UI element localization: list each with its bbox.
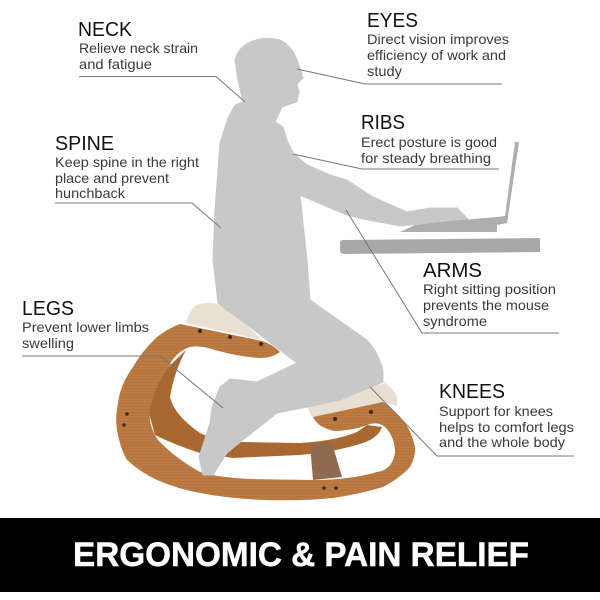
ribs heading: RIBS: [361, 111, 405, 134]
ribs callout: [293, 111, 499, 169]
eyes leader line: [297, 69, 502, 84]
arms text: prevents the mouse: [423, 297, 549, 313]
knees text: helps to comfort legs: [439, 419, 574, 435]
spine text: hunchback: [55, 185, 126, 201]
eyes text: [367, 31, 509, 79]
neck heading: NECK: [78, 18, 132, 41]
neck text: Relieve neck strain: [79, 40, 198, 56]
arms leader line: [346, 210, 559, 333]
seat cushion: [186, 303, 262, 340]
spine callout: [55, 132, 221, 228]
main wooden frame: [116, 324, 415, 500]
ribs leader line: [293, 154, 499, 169]
ribs text: Erect posture is good: [361, 134, 497, 150]
neck callout: [78, 18, 245, 102]
eyes callout: [297, 9, 509, 84]
legs text: swelling: [22, 335, 74, 351]
eyes text: study: [367, 63, 402, 79]
laptop: [400, 142, 519, 232]
spine heading: SPINE: [55, 132, 114, 155]
rocking chair: [116, 303, 415, 500]
cross strut: [310, 443, 342, 480]
eyes text: efficiency of work and: [367, 47, 506, 63]
inner rail: [148, 350, 382, 458]
person silhouette: [199, 38, 468, 475]
eyes heading: EYES: [367, 9, 418, 32]
spine text: place and prevent: [55, 170, 169, 186]
desk: [340, 238, 540, 254]
legs heading: LEGS: [22, 297, 74, 320]
ribs text: for steady breathing: [361, 150, 491, 166]
frame bolts: [122, 329, 373, 490]
neck leader line: [79, 76, 245, 102]
neck text: [79, 40, 198, 72]
legs text: [22, 319, 149, 351]
knees callout: [370, 380, 574, 456]
legs callout: [22, 297, 223, 408]
knees heading: KNEES: [439, 380, 505, 403]
spine leader line: [55, 203, 221, 228]
title banner: [0, 518, 600, 592]
eyes text: Direct vision improves: [367, 31, 509, 47]
knees text: and the whole body: [439, 434, 565, 450]
legs leader line: [22, 356, 223, 408]
knees text: Support for knees: [439, 403, 553, 419]
arms heading: ARMS: [423, 259, 482, 282]
ribs text: [361, 134, 497, 166]
neck text: and fatigue: [79, 56, 152, 72]
spine text: [55, 154, 199, 201]
legs text: Prevent lower limbs: [22, 319, 149, 335]
arms text: Right sitting position: [423, 281, 556, 297]
arms callout: [346, 210, 559, 333]
title: ERGONOMIC & PAIN RELIEF: [73, 536, 529, 574]
arms text: [423, 281, 556, 329]
knees text: [439, 403, 574, 450]
knees leader line: [370, 387, 574, 456]
knee cushion: [308, 383, 397, 418]
spine text: Keep spine in the right: [55, 154, 199, 170]
arms text: syndrome: [423, 313, 487, 329]
